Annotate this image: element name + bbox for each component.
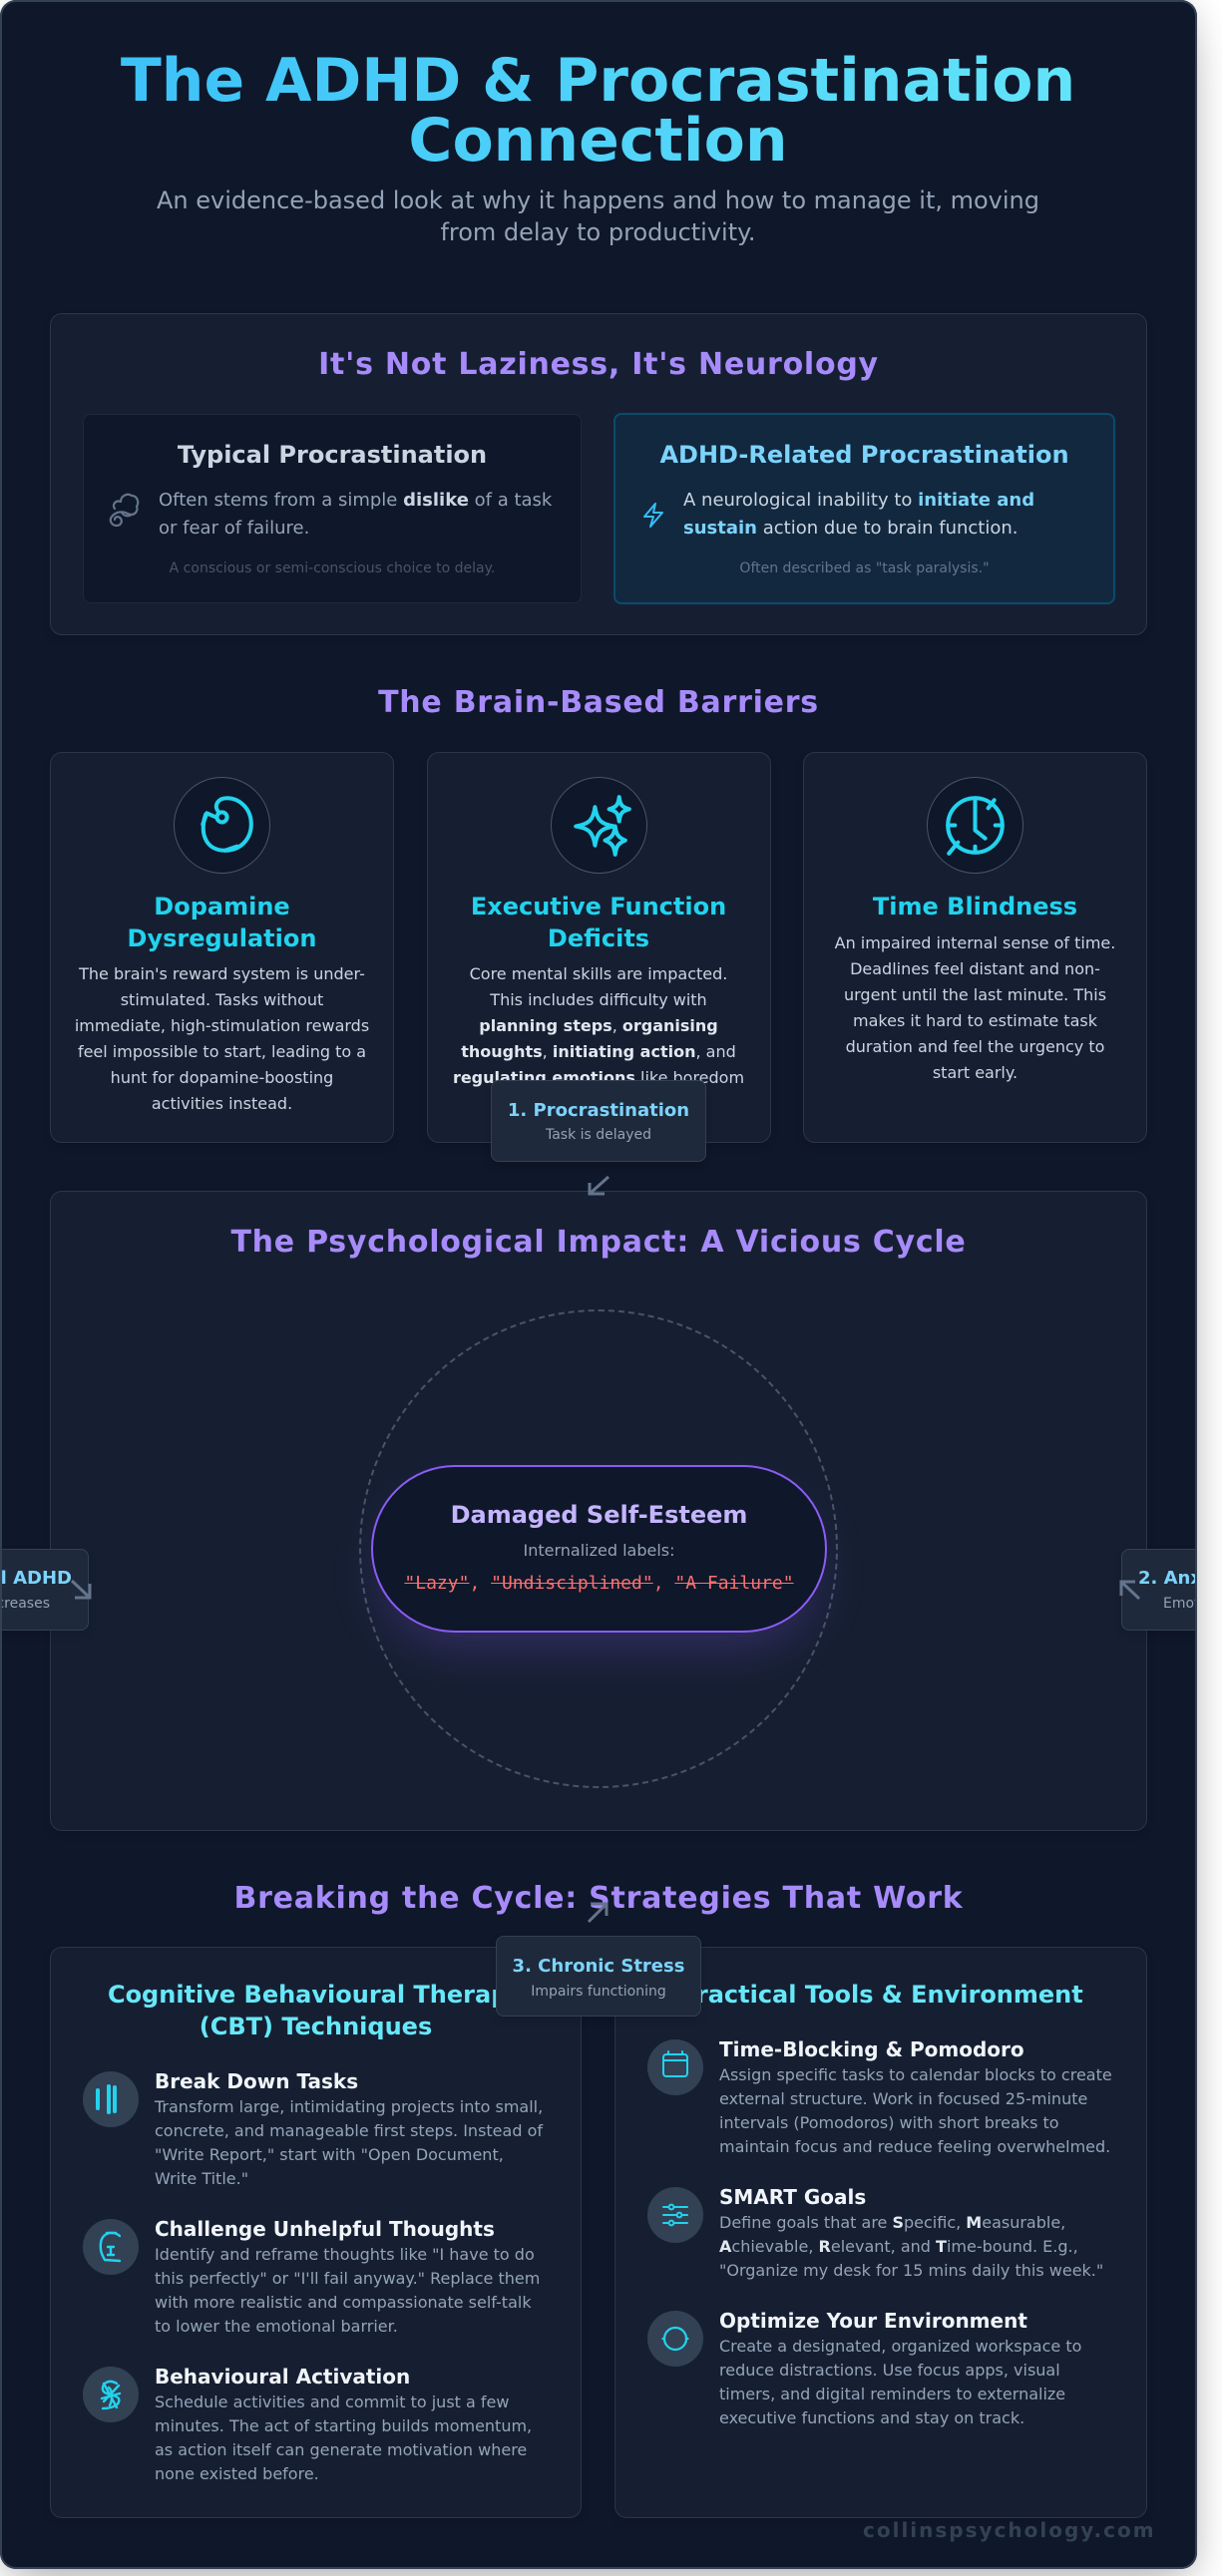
card heading: Executive Function — [471, 893, 726, 920]
heading: vicious cycle: The Psychological Impact: A Vicious Cycle — [230, 1225, 967, 1260]
card text: Often stems from a simple dislike of a task — [159, 490, 552, 511]
card text: hunt for dopamine-boosting — [111, 1068, 333, 1087]
item title: SMART Goals — [719, 2185, 866, 2209]
card text: Deadlines feel distant and non- — [850, 959, 1100, 978]
card caption: A conscious or semi-conscious choice to delay. — [170, 560, 495, 576]
panel: dopamine dysregulation — [50, 752, 394, 1143]
card text: planning steps, organising — [479, 1016, 718, 1035]
panel heading: (CBT) Techniques — [200, 2013, 432, 2040]
card text — [834, 933, 1115, 1082]
card heading: Dysregulation — [128, 924, 316, 952]
item text: with more realistic and compassionate self-talk — [155, 2293, 532, 2312]
card heading: Deficits — [548, 924, 649, 952]
card text: An impaired internal sense of time. — [835, 933, 1115, 952]
icon: bars — [83, 2071, 139, 2127]
item: optimize environment — [647, 2309, 1081, 2427]
card text: urgent until the last minute. This — [844, 985, 1106, 1004]
cycle node 2: anxiety — [1121, 1549, 1222, 1631]
heading: neurology: It's Not Laziness, It's Neurology — [318, 347, 879, 382]
item text — [155, 2245, 540, 2336]
item text: Define goals that are Specific, Measurable, — [719, 2213, 1065, 2232]
panel: practical tools — [614, 1947, 1147, 2518]
subtitle — [157, 186, 1039, 246]
card text: or fear of failure. — [159, 518, 309, 539]
node text: Task is delayed — [546, 1127, 651, 1143]
icon: swirl — [174, 777, 270, 874]
card: ADHD-related procrastination — [613, 413, 1115, 604]
item text: concrete, and manageable first steps. Instead of — [155, 2121, 543, 2140]
item title: Optimize Your Environment — [719, 2309, 1027, 2333]
item: time-blocking — [647, 2037, 1112, 2156]
icon: clock — [927, 777, 1023, 874]
item text: to lower the emotional barrier. — [155, 2317, 398, 2336]
internalized labels: "Lazy", "Undisciplined", "A Failure" — [404, 1573, 794, 1594]
cycle node 4: overall ADHD — [0, 1549, 89, 1631]
arrow: node 3 to node 4 — [588, 1903, 609, 1923]
pill sublabel: Internalized labels: — [523, 1541, 674, 1560]
panel heading — [108, 1981, 524, 2040]
item text: Transform large, intimidating projects into small, — [155, 2097, 543, 2116]
card text: makes it hard to estimate task — [853, 1011, 1097, 1030]
item text: Assign specific tasks to calendar blocks to create — [719, 2065, 1112, 2084]
card text: feel impossible to start, leading to a — [78, 1042, 366, 1061]
card heading: Typical Procrastination — [178, 441, 487, 469]
panel: time blindness — [803, 752, 1147, 1143]
item text: timers, and digital reminders to externalize — [719, 2385, 1065, 2403]
dashed cycle ring — [359, 1309, 838, 1788]
card text: activities instead. — [152, 1094, 292, 1113]
item text: "Organize my desk for 15 mins daily this week." — [719, 2261, 1103, 2280]
item text: minutes. The act of starting builds momentum, — [155, 2416, 532, 2435]
item text: as action itself can generate motivation where — [155, 2440, 527, 2459]
pill heading: Damaged Self-Esteem — [451, 1501, 747, 1529]
node title: 1. Procrastination — [508, 1100, 689, 1121]
icon: lightning bolt — [643, 503, 663, 528]
node title: 3. Chronic Stress — [513, 1956, 684, 1977]
card heading — [128, 893, 316, 952]
item text: Achievable, Relevant, and Time-bound. E.g., — [719, 2237, 1078, 2256]
card text — [453, 964, 744, 1087]
item title: Behavioural Activation — [155, 2365, 410, 2389]
card text: A neurological inability to initiate and — [683, 490, 1034, 511]
arrow: node 4 to node 1 — [71, 1580, 92, 1600]
subtitle: from delay to productivity. — [440, 218, 756, 246]
card text: stimulated. Tasks without — [121, 990, 323, 1009]
item title: Break Down Tasks — [155, 2069, 358, 2093]
item text: Schedule activities and commit to just a few — [155, 2392, 509, 2411]
item text: maintain focus and reduce feeling overwhelmed. — [719, 2137, 1110, 2156]
item: SMART goals — [647, 2185, 1103, 2280]
item text: this perfectly" or "I'll fail anyway." Replace them — [155, 2269, 540, 2288]
subtitle: An evidence-based look at why it happens and how to manage it, moving — [157, 186, 1039, 214]
watermark: collinspsychology.com — [863, 2518, 1156, 2542]
item text — [719, 2337, 1081, 2427]
card heading — [471, 893, 726, 952]
panel: vicious cycle — [50, 1191, 1147, 1831]
panel heading: Practical Tools & Environment — [678, 1981, 1083, 2009]
card text: sustain action due to brain function. — [683, 518, 1018, 539]
icon: sliders — [647, 2187, 703, 2243]
item text: external structure. Work in focused 25-minute — [719, 2089, 1087, 2108]
item text: executive functions and stay on track. — [719, 2408, 1024, 2427]
card text: Core mental skills are impacted. — [470, 964, 727, 983]
arrow: node 2 to node 3 — [1119, 1580, 1140, 1600]
item text: Create a designated, organized workspace to — [719, 2337, 1081, 2356]
panel: executive function deficits — [427, 752, 770, 1143]
center pill: damaged self-esteem — [371, 1465, 827, 1633]
item text: "Write Report," start with "Open Document, — [155, 2145, 504, 2164]
card text: duration and feel the urgency to — [846, 1037, 1104, 1056]
card text: This includes difficulty with — [490, 990, 707, 1009]
card text: The brain's reward system is under- — [79, 964, 365, 983]
card caption: Often described as "task paralysis." — [739, 560, 990, 576]
item text: Identify and reframe thoughts like "I have to do — [155, 2245, 535, 2264]
icon: head — [83, 2219, 139, 2275]
panel: CBT techniques — [50, 1947, 582, 2518]
item: behavioural activation — [83, 2365, 532, 2483]
icon: calendar — [647, 2039, 703, 2095]
item text — [154, 2097, 543, 2188]
icon: scribble — [83, 2367, 139, 2422]
item text: Write Title." — [155, 2169, 248, 2188]
item text: intervals (Pomodoros) with short breaks to — [719, 2113, 1059, 2132]
card text: immediate, high-stimulation rewards — [75, 1016, 369, 1035]
item: break down tasks — [83, 2069, 543, 2188]
title: The ADHD & Procrastination — [121, 46, 1075, 116]
icon: circle — [647, 2311, 703, 2367]
card text — [159, 490, 553, 539]
card heading: Time Blindness — [873, 893, 1077, 920]
node text: Impairs functioning — [531, 1984, 666, 2000]
item text: none existed before. — [155, 2464, 319, 2483]
heading: brain-based barriers: The Brain-Based Barriers — [378, 685, 819, 720]
item text — [155, 2392, 532, 2483]
card text: start early. — [933, 1063, 1018, 1082]
card heading: ADHD-Related Procrastination — [659, 441, 1069, 469]
item: challenge thoughts — [83, 2217, 540, 2336]
arrow: node 1 to node 2 — [589, 1176, 610, 1195]
cycle node 3: chronic stress — [496, 1936, 701, 2017]
item text — [719, 2065, 1112, 2156]
icon: sparkles — [551, 777, 646, 874]
item text — [719, 2213, 1103, 2280]
item text: reduce distractions. Use focus apps, visual — [719, 2361, 1060, 2380]
heading: breaking the cycle: Breaking the Cycle: Strategies That Work — [233, 1881, 964, 1916]
card heading: Dopamine — [154, 893, 290, 920]
card text: thoughts, initiating action, and — [461, 1042, 736, 1061]
card text: regulating emotions like boredom — [453, 1068, 744, 1087]
icon: cloud — [110, 493, 140, 527]
card text — [683, 490, 1034, 539]
panel heading: Cognitive Behavioural Therapy — [108, 1981, 524, 2009]
panel: not laziness, neurology — [50, 313, 1147, 635]
item title: Challenge Unhelpful Thoughts — [155, 2217, 495, 2241]
item title: Time-Blocking & Pomodoro — [719, 2037, 1024, 2061]
title: Connection — [408, 106, 788, 176]
card: typical procrastination — [83, 414, 582, 603]
title — [0, 51, 1196, 171]
cycle node 1: procrastination — [491, 1080, 706, 1162]
card text — [75, 964, 369, 1113]
